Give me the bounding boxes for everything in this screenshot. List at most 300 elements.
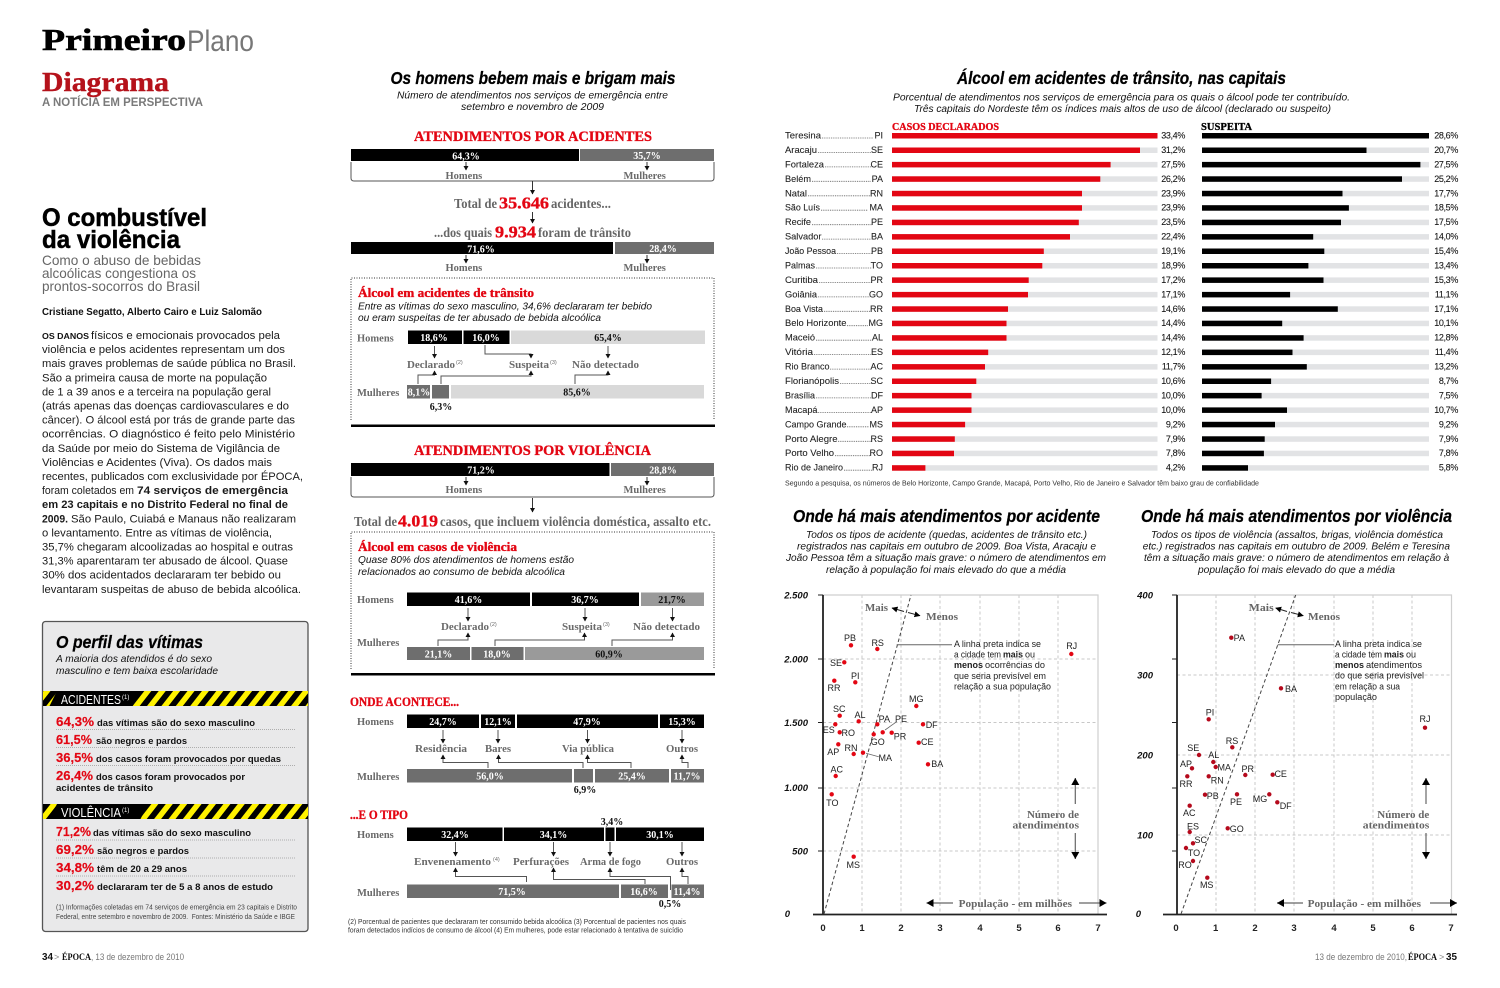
- point labels: PA: [1234, 633, 1245, 643]
- connectors and categories: (2): [456, 360, 463, 366]
- point labels: MA: [879, 753, 892, 763]
- footer right: 35: [1446, 952, 1457, 963]
- total de acidentes: [454, 194, 611, 212]
- article body text: [42, 330, 303, 596]
- middle column title: [390, 68, 676, 113]
- row: Palmas: 18,9%: [1161, 260, 1185, 270]
- row: Brasília: 10,0%: [1161, 390, 1185, 400]
- stacked bar: sexo, violência: [351, 463, 714, 476]
- row: Goiânia: Goiânia: [785, 289, 817, 299]
- point labels: DF: [926, 720, 938, 730]
- point labels: AL: [854, 710, 866, 720]
- middle column title: Número de atendimentos nos serviços de emergência entre: [397, 90, 668, 102]
- row: Recife: [785, 217, 1458, 227]
- article body text: câncer). O álcool está por trás de grande parte das: [42, 415, 296, 427]
- point labels: RO: [1178, 860, 1192, 870]
- article subheading: [42, 252, 201, 294]
- list: acidentes stats: dos casos foram provocados por: [96, 772, 245, 783]
- connectors and categories: [438, 608, 700, 646]
- article body text: em 23 capitais e no Distrito Federal no final de: [42, 499, 288, 511]
- footer left: ÉPOCA: [62, 951, 91, 963]
- connectors and categories: [415, 730, 698, 768]
- box: álcool em acidentes de trânsito: ou eram suspeitas de ter abusado de bebida alcoólica: [358, 312, 601, 324]
- bracket: homens e mulheres: [351, 162, 714, 182]
- row: Aracaju: SE: [871, 145, 883, 155]
- connectors and categories: [414, 842, 698, 890]
- point labels: PI: [851, 671, 860, 681]
- axes: 1: [1213, 923, 1219, 934]
- panel: onde acontece: [350, 694, 704, 796]
- scatter chart: acidentes: [783, 590, 1107, 934]
- point labels: GO: [871, 737, 885, 747]
- more or less indicator: Menos: [926, 612, 958, 623]
- row: Boa Vista: 14,6%: [1161, 304, 1185, 314]
- point labels: BA: [1285, 684, 1297, 694]
- row: Boa Vista: [785, 304, 1458, 314]
- row: Goiânia: [785, 289, 1458, 299]
- connectors and categories: (3): [550, 360, 557, 366]
- annotation: linha preta: a cidade tem: [1335, 650, 1382, 660]
- connectors and categories: Residência: [415, 744, 468, 755]
- row: Campo Grande: MS: [870, 419, 883, 429]
- bars: mulheres: 60,9%: [595, 650, 623, 660]
- article body text: 2009.: [42, 513, 68, 525]
- row: Vitória: [785, 347, 1458, 357]
- bracket: homens e mulheres: Mulheres: [624, 485, 666, 496]
- row: Maceió: 12,8%: [1434, 333, 1458, 343]
- list: acidentes stats: 26,4%: [56, 768, 93, 783]
- annotation: linha preta: menos: [954, 660, 983, 670]
- bars: homens: 34,1%: [540, 830, 567, 841]
- table footnote: Segundo a pesquisa, os números de Belo Horizonte, Campo Grande, Macapá, Porto Velho, Rio de Janeiro e Salvador têm baixo grau de confiabilidade: [785, 480, 1259, 488]
- point labels: SC: [1194, 835, 1207, 845]
- row: Florianópolis: Florianópolis: [785, 376, 840, 386]
- stacked bar: sexo, violência: 71,2%: [467, 466, 495, 476]
- row: Natal: 23,9%: [1161, 188, 1185, 198]
- axes: 3: [937, 923, 943, 934]
- section header: Primeiro Plano: Plano: [187, 25, 254, 58]
- chart heading: violência: têm a situação mais grave: o número de atendimentos em relação à: [1144, 552, 1449, 564]
- total de trânsito: [434, 222, 631, 242]
- list: violência stats: das vítimas são do sexo masculino: [93, 828, 251, 839]
- row: Natal: 17,7%: [1434, 188, 1458, 198]
- list: acidentes stats: 64,3%: [56, 714, 94, 729]
- bars: homens: [357, 592, 704, 606]
- footer right: ÉPOCA: [1408, 951, 1437, 963]
- row: Campo Grande: Campo Grande: [785, 419, 846, 429]
- row: Maceió: 14,4%: [1161, 333, 1185, 343]
- total de casos: 4.019: [398, 512, 438, 530]
- connectors and categories: Via pública: [562, 744, 615, 755]
- box: álcool em casos de violência: Álcool em casos de violência: [358, 540, 518, 554]
- axes: 7: [1095, 923, 1101, 934]
- point labels: PI: [1206, 708, 1214, 718]
- total de trânsito: foram de trânsito: [538, 225, 631, 240]
- hazard band: violência: (1): [122, 808, 129, 814]
- bars: mulheres: Mulheres: [357, 638, 399, 649]
- annotation: linha preta: A linha preta indica se: [954, 639, 1041, 649]
- connectors and categories: Envenenamento: [414, 857, 491, 868]
- row: Porto Velho: 7,8%: [1439, 448, 1458, 458]
- row: Rio Branco: Rio Branco: [785, 362, 830, 372]
- axes: [783, 590, 1107, 934]
- annotation: linha preta: em relação a sua: [1335, 682, 1400, 692]
- bars: mulheres: 21,1%: [425, 650, 452, 660]
- bars: mulheres: 25,4%: [618, 772, 646, 782]
- list: acidentes stats: dos casos foram provocados por quedas: [96, 754, 281, 765]
- connectors and categories: (3): [603, 622, 610, 628]
- connectors and categories: Perfurações: [513, 857, 569, 868]
- arrow: [532, 181, 534, 194]
- box: álcool em acidentes de trânsito: Entre as vítimas do sexo masculino, 34,6% declararam ter bebido: [358, 300, 652, 312]
- bars: homens: Homens: [357, 595, 394, 606]
- row: São Luís: [785, 203, 1458, 213]
- bars: mulheres: Mulheres: [357, 388, 399, 399]
- stacked bar: sexo, acidentes: 35,7%: [633, 151, 661, 162]
- more or less indicator: Menos: [1308, 612, 1340, 623]
- axes: 200: [1136, 750, 1154, 762]
- article body text: ocorrências. O diagnóstico é feito pelo Ministério: [42, 429, 295, 441]
- axes: 6: [1409, 923, 1415, 934]
- row: Florianópolis: [785, 376, 1458, 386]
- point labels: MG: [1253, 794, 1267, 804]
- bars: homens: Homens: [357, 334, 394, 344]
- chart heading: acidentes: registrados nas capitais em outubro de 2009. Boa Vista, Aracaju e: [797, 540, 1096, 552]
- middle column footnote: foram detectados indícios de consumo de álcool (4) Em mulheres, pode estar relacionado à tentativa de suicídio: [348, 928, 683, 934]
- row: Macapá: Macapá: [785, 405, 818, 415]
- article body text: recentes, publicados com exclusividade por ÉPOCA,: [42, 470, 303, 483]
- axes: 300: [1137, 670, 1154, 682]
- chart heading: acidentes: Onde há mais atendimentos por acidente: [793, 506, 1100, 526]
- row: Belém: [785, 174, 1458, 184]
- row: Goiânia: 17,1%: [1161, 289, 1185, 299]
- row: Brasília: Brasília: [785, 390, 815, 400]
- chart heading: violência: etc.) registrados nas capitais em outubro de 2009. Belém e Teresina: [1143, 540, 1450, 552]
- total de casos: [354, 512, 711, 530]
- footer left: >: [54, 952, 59, 962]
- point labels: MS: [847, 860, 860, 870]
- row: Campo Grande: 9,2%: [1166, 419, 1185, 429]
- bars: homens: 16,0%: [472, 333, 500, 344]
- more or less indicator: [1249, 603, 1340, 623]
- annotation: linha preta: [897, 639, 1051, 692]
- heading: Diagrama: [42, 67, 203, 109]
- chart heading: acidentes: relação à população foi mais elevado do que a média: [826, 564, 1066, 576]
- bars: mulheres: [357, 385, 704, 413]
- title: álcool nas capitais: [893, 67, 1350, 115]
- annotation: linha preta: relação a sua população: [954, 682, 1051, 692]
- row: Curitiba: PR: [870, 275, 883, 285]
- bars: homens: [357, 817, 704, 841]
- row: Belo Horizonte: [785, 318, 1458, 328]
- stacked bar: sexo, acidentes: 64,3%: [452, 152, 480, 162]
- bracket: homens e mulheres: Homens: [446, 171, 482, 182]
- axes: 6: [1055, 923, 1061, 934]
- bars: homens: 21,7%: [658, 595, 686, 606]
- point labels: MA: [1218, 762, 1231, 772]
- bars: homens: 3,4%: [601, 817, 623, 828]
- arrow: [532, 212, 534, 223]
- panel: atendimentos por acidentes: [351, 129, 715, 427]
- row: Belo Horizonte: 10,1%: [1434, 318, 1458, 328]
- row: Belém: 25,2%: [1434, 174, 1458, 184]
- row: Porto Alegre: [785, 434, 1458, 444]
- axes: 2.000: [783, 654, 809, 666]
- annotation: linha preta: mais: [1384, 650, 1404, 660]
- hazard band: acidentes: (1): [122, 695, 129, 701]
- bars: homens: 65,4%: [594, 333, 622, 344]
- middle column title: setembro e novembro de 2009: [461, 101, 604, 113]
- row: São Luís: MA: [870, 203, 883, 213]
- row: João Pessoa: João Pessoa: [785, 246, 836, 256]
- middle column footnote: [348, 919, 686, 934]
- list: acidentes stats: acidentes de trânsito: [56, 783, 153, 794]
- bars: homens: Homens: [357, 717, 394, 728]
- connectors and categories: [407, 345, 639, 384]
- chart heading: violência: Todos os tipos de violência (assaltos, brigas, violência doméstica: [1151, 529, 1443, 541]
- row: Porto Alegre: RS: [870, 434, 883, 444]
- article subheading: Como o abuso de bebidas: [42, 252, 201, 268]
- annotation: linha preta: ou: [1406, 650, 1416, 660]
- connectors and categories: Bares: [485, 744, 511, 755]
- bars: mulheres: 6,9%: [574, 785, 596, 796]
- bars: homens: 24,7%: [429, 717, 457, 728]
- bars: mulheres: Mulheres: [357, 772, 399, 783]
- row: Natal: Natal: [785, 188, 807, 198]
- annotation: linha preta: menos: [1335, 660, 1364, 670]
- row: Natal: [785, 188, 1458, 198]
- bracket: homens e mulheres: Mulheres: [624, 171, 666, 182]
- row: Vitória: Vitória: [785, 347, 813, 357]
- list: acidentes stats: 61,5%: [56, 732, 92, 747]
- axis label: população: População - em milhões: [1308, 899, 1421, 910]
- panel heading: O perfil das vítimas: [56, 632, 203, 652]
- row: Porto Velho: Porto Velho: [785, 448, 834, 458]
- row: Rio de Janeiro: 4,2%: [1166, 463, 1185, 473]
- row: Porto Velho: [785, 448, 1458, 458]
- point labels: RR: [1180, 779, 1193, 789]
- row: Belo Horizonte: 14,4%: [1161, 318, 1185, 328]
- row: Brasília: DF: [871, 390, 883, 400]
- row: Rio Branco: 11,7%: [1162, 362, 1185, 372]
- point labels: RN: [844, 743, 858, 753]
- point labels: DF: [1280, 801, 1292, 811]
- article body text: físicos e emocionais provocados pela: [91, 330, 281, 342]
- total de acidentes: acidentes...: [551, 196, 611, 211]
- article body text: o levantamento. Entre as vítimas de violência,: [42, 527, 272, 539]
- chart heading: acidentes: [785, 506, 1106, 576]
- row: Boa Vista: RR: [870, 304, 883, 314]
- row: Fortaleza: [785, 159, 1458, 169]
- row: Goiânia: 11,1%: [1435, 289, 1458, 299]
- bars: mulheres: 16,6%: [630, 887, 658, 898]
- row: Florianópolis: SC: [870, 376, 883, 386]
- bars: homens: 41,6%: [455, 595, 482, 606]
- panel heading: [55, 632, 218, 677]
- scatter chart: violência: [1136, 590, 1457, 934]
- footer right: >: [1439, 952, 1444, 962]
- bar table: capitais: [785, 122, 1458, 488]
- axes: 4: [977, 923, 983, 934]
- row: São Luís: 23,9%: [1161, 203, 1185, 213]
- bars: mulheres: 18,0%: [483, 650, 511, 660]
- heading: ATENDIMENTOS POR VIOLÊNCIA: [414, 442, 651, 459]
- article body text: mais graves problemas de saúde pública no Brasil.: [42, 358, 296, 370]
- point labels: RJ: [1420, 714, 1430, 724]
- heading: ATENDIMENTOS POR ACIDENTES: [414, 129, 652, 145]
- article body text: violência e pelos acidentes representam um dos: [42, 344, 286, 356]
- stacked bar: sexo, trânsito: [351, 242, 714, 274]
- row: João Pessoa: 19,1%: [1161, 246, 1185, 256]
- list: violência stats: declararam ter de 5 a 8 anos de estudo: [97, 882, 273, 893]
- axes: 3: [1291, 923, 1297, 934]
- row: Maceió: Maceió: [785, 333, 815, 343]
- row: Recife: PE: [871, 217, 883, 227]
- bars: homens: [357, 330, 705, 344]
- row: Macapá: 10,0%: [1161, 405, 1185, 415]
- row: Porto Alegre: Porto Alegre: [785, 434, 838, 444]
- total de trânsito: ...dos quais: [434, 225, 492, 240]
- row: Rio Branco: AC: [870, 362, 883, 372]
- bars: mulheres: [357, 769, 704, 796]
- list: acidentes stats: das vítimas são do sexo masculino: [97, 718, 255, 729]
- bars: homens: [357, 714, 704, 728]
- list: acidentes stats: [56, 714, 295, 794]
- middle column title: Os homens bebem mais e brigam mais: [390, 68, 676, 88]
- row: São Luís: São Luís: [785, 203, 820, 213]
- axes: 2: [898, 923, 904, 934]
- list: violência stats: [56, 824, 295, 893]
- row: Fortaleza: Fortaleza: [785, 159, 824, 169]
- axis label: número de atendimentos: [1363, 778, 1430, 859]
- panel: O perfil das vítimas: [42, 622, 308, 932]
- point labels: AP: [827, 747, 839, 757]
- connectors and categories: Não detectado: [633, 622, 700, 633]
- row: Recife: 17,5%: [1434, 217, 1458, 227]
- chart heading: violência: [1141, 506, 1452, 576]
- connectors and categories: Não detectado: [572, 360, 639, 371]
- bars: mulheres: 11,4%: [674, 887, 700, 898]
- row: Brasília: 7,5%: [1439, 390, 1458, 400]
- title: álcool nas capitais: Álcool em acidentes de trânsito, nas capitais: [956, 67, 1286, 88]
- panel: atendimentos por violência: [351, 442, 715, 676]
- heading: Diagrama: A NOTÍCIA EM PERSPECTIVA: [42, 96, 203, 109]
- row: Belém: 26,2%: [1161, 174, 1185, 184]
- row: Palmas: TO: [871, 260, 883, 270]
- row: Fortaleza: 27,5%: [1161, 159, 1185, 169]
- connectors and categories: Declarado: [407, 360, 455, 371]
- bars: mulheres: 8,1%: [408, 388, 430, 398]
- point labels: GO: [1230, 824, 1244, 834]
- list: acidentes stats: são negros e pardos: [96, 736, 187, 747]
- row: Recife: 23,5%: [1161, 217, 1185, 227]
- article body text: 35,7% chegaram alcoolizadas ao hospital e outras: [42, 542, 294, 554]
- bars: mulheres: [357, 638, 704, 660]
- title: álcool nas capitais: Porcentual de atendimentos nos serviços de emergência para os quais o álcool pode ter contribuído.: [893, 92, 1350, 104]
- bars: homens: Homens: [357, 830, 394, 841]
- section header: Primeiro Plano: [42, 22, 254, 58]
- row: Campo Grande: [785, 419, 1458, 429]
- article body text: 74 serviços de emergência: [137, 485, 289, 497]
- hazard band: acidentes: ACIDENTES: [61, 692, 121, 707]
- connectors and categories: Suspeita: [509, 360, 550, 371]
- column heading: suspeita: SUSPEITA: [1201, 122, 1252, 133]
- row: Vitória: 12,1%: [1161, 347, 1185, 357]
- row: Aracaju: 31,2%: [1161, 145, 1185, 155]
- list: violência stats: 34,8%: [56, 860, 94, 875]
- heading: ONDE ACONTECE...: [350, 694, 459, 709]
- box: álcool em acidentes de trânsito: Álcool em acidentes de trânsito: [358, 286, 534, 300]
- row: Curitiba: 15,3%: [1434, 275, 1458, 285]
- row: Belém: Belém: [785, 174, 811, 184]
- point labels: RN: [1211, 776, 1224, 786]
- point labels: [1178, 633, 1430, 890]
- point labels: MS: [1200, 880, 1213, 890]
- row: Salvador: BA: [871, 232, 883, 242]
- footer right: [1315, 951, 1457, 963]
- row: Macapá: AP: [871, 405, 883, 415]
- box: álcool em casos de violência: Quase 80% dos atendimentos de homens estão: [358, 554, 574, 566]
- row: Recife: Recife: [785, 217, 811, 227]
- heading: ...E O TIPO: [350, 807, 408, 822]
- hazard band: acidentes: [43, 691, 308, 707]
- annotation: linha preta: mais: [1003, 650, 1023, 660]
- axes: 4: [1331, 923, 1337, 934]
- connectors and categories: Outros: [666, 744, 698, 755]
- point labels: PB: [1207, 791, 1219, 801]
- row: João Pessoa: 15,4%: [1434, 246, 1458, 256]
- row: Vitória: 11,4%: [1435, 347, 1458, 357]
- stacked bar: sexo, acidentes: [351, 149, 714, 162]
- row: Natal: RN: [870, 188, 883, 198]
- annotation: linha preta: a cidade tem: [954, 650, 1001, 660]
- axis label: número de atendimentos: [1012, 778, 1079, 859]
- row: Porto Alegre: 7,9%: [1166, 434, 1185, 444]
- footer right: 13 de dezembro de 2010,: [1315, 952, 1407, 962]
- point labels: PA: [879, 714, 890, 724]
- article body text: OS DANOS: [42, 331, 89, 341]
- article subheading: alcoólicas congestiona os: [42, 265, 196, 281]
- row: Goiânia: GO: [869, 289, 883, 299]
- row: Salvador: 14,0%: [1434, 232, 1458, 242]
- article body text: São a primeira causa de morte na população: [42, 372, 267, 384]
- bars: mulheres: Mulheres: [357, 888, 399, 899]
- axes: 0: [820, 923, 826, 934]
- panel heading: A maioria dos atendidos é do sexo: [55, 653, 212, 665]
- row: Palmas: Palmas: [785, 260, 815, 270]
- data points: [823, 633, 1077, 870]
- bars: mulheres: [357, 884, 704, 910]
- point labels: MG: [909, 694, 924, 704]
- article subheading: prontos-socorros do Brasil: [42, 278, 200, 294]
- article body text: (atrás apenas das doenças cardiovasculares e do: [42, 400, 289, 412]
- row: Florianópolis: 8,7%: [1439, 376, 1458, 386]
- bracket: homens e mulheres: Homens: [446, 485, 482, 496]
- row: Curitiba: Curitiba: [785, 275, 818, 285]
- axes: 5: [1016, 923, 1022, 934]
- more or less indicator: Mais: [1249, 603, 1274, 614]
- article body text: 31,3% aparentaram ter abusado de álcool. Quase: [42, 556, 288, 568]
- bars: homens: 47,9%: [573, 717, 601, 728]
- article body text: Violências e Acidentes (Viva). Os dados mais: [42, 457, 273, 469]
- point labels: RO: [842, 728, 855, 738]
- point labels: SE: [830, 658, 842, 668]
- axes: 0: [1173, 923, 1179, 934]
- row: Porto Velho: 7,8%: [1166, 448, 1185, 458]
- arrow: [532, 498, 534, 512]
- article body text: de 1 a 39 anos e a terceira na população geral: [42, 386, 271, 398]
- annotation: linha preta: do que seria previsível: [1335, 670, 1424, 680]
